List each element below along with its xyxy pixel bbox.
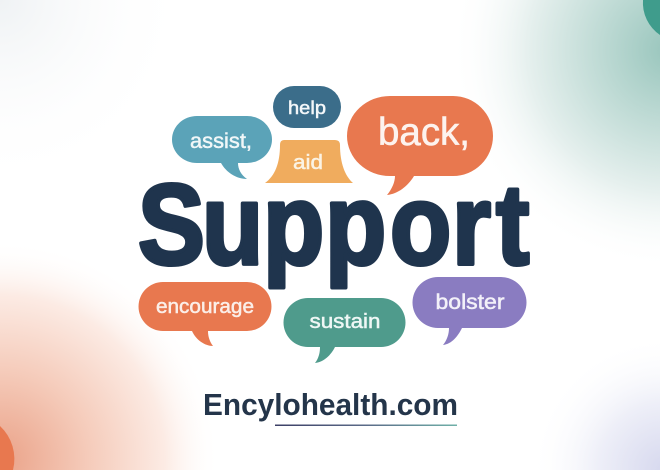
bubble: back bbox=[347, 96, 493, 195]
bubble: back: back, bbox=[378, 111, 470, 154]
bubble: encourage: encourage bbox=[156, 296, 254, 318]
bubble: aid bbox=[265, 140, 353, 183]
bubble: aid: aid bbox=[293, 152, 323, 174]
bubble: bolster: bolster bbox=[436, 291, 505, 314]
corner circle: teal bbox=[643, 0, 660, 35]
bubble: bolster bbox=[413, 277, 527, 345]
bubble: help bbox=[273, 86, 341, 128]
website label: Encylohealth.com bbox=[203, 387, 458, 422]
corner circle: orange bbox=[0, 426, 14, 470]
bubble: encourage bbox=[139, 282, 271, 346]
bubble: help: help bbox=[288, 97, 326, 118]
bubble: sustain: sustain bbox=[310, 311, 380, 333]
bubble: assist: assist, bbox=[190, 129, 252, 153]
headline: Support: Support bbox=[138, 161, 529, 288]
bubble: sustain bbox=[284, 298, 405, 363]
bubble: assist bbox=[172, 116, 272, 179]
